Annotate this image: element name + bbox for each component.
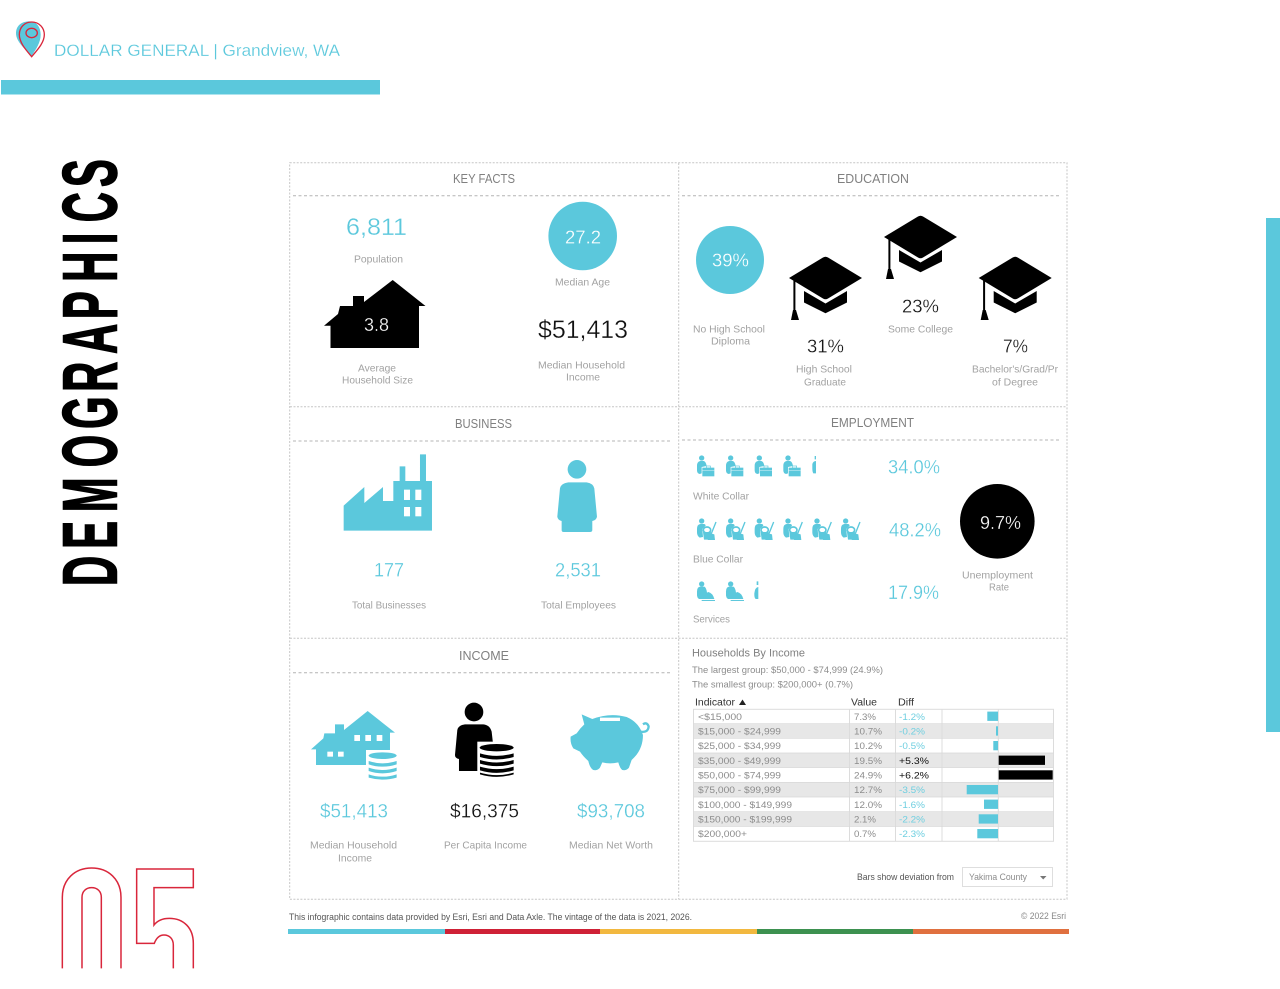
row differences bbox=[899, 712, 930, 840]
table header: Diff bbox=[898, 698, 914, 709]
row differences: +6.2% bbox=[899, 770, 930, 782]
footer: data attribution: This infographic contains data provided by Esri, Esri and Data Axle. The vintage of the data is 2021, 2026. bbox=[289, 912, 692, 923]
row values: 19.5% bbox=[854, 756, 883, 767]
stat: some college: Some College bbox=[888, 323, 953, 335]
table header bbox=[695, 698, 914, 709]
deviation bars bbox=[967, 712, 1053, 838]
stat: median household income: Median Household bbox=[538, 360, 625, 372]
row labels: $25,000 - $34,999 bbox=[698, 741, 781, 752]
stat: high school graduate bbox=[789, 257, 862, 389]
stat: per capita income: Per Capita Income bbox=[444, 840, 527, 852]
stat: total employees: 2,531 bbox=[555, 561, 601, 582]
row values bbox=[854, 712, 883, 840]
stat: bachelor's or higher degree: of Degree bbox=[992, 377, 1038, 389]
row labels: $100,000 - $149,999 bbox=[698, 800, 792, 811]
stat: per capita income: $16,375 bbox=[450, 802, 519, 823]
stat: blue collar: 48.2% bbox=[889, 521, 941, 542]
stat: white collar: 34.0% bbox=[888, 458, 940, 479]
stat: blue collar: Blue Collar bbox=[693, 554, 743, 566]
stat: total employees: Total Employees bbox=[541, 600, 616, 612]
row values: 0.7% bbox=[854, 829, 877, 840]
summary: largest group: The largest group: $50,000 - $74,999 (24.9%) bbox=[692, 665, 883, 676]
stat: some college: 23% bbox=[902, 297, 939, 317]
icon: factory bbox=[344, 454, 432, 531]
stat: median net worth: $93,708 bbox=[577, 802, 645, 823]
icon: employee person bbox=[557, 460, 597, 532]
stat: unemployment rate circle: Unemployment bbox=[962, 570, 1033, 582]
pictogram: services workers bbox=[697, 581, 758, 601]
pictogram: blue collar workers bbox=[697, 518, 860, 540]
stat: high school graduate: High School bbox=[796, 364, 852, 376]
stat: population bbox=[346, 214, 407, 266]
row labels: $75,000 - $99,999 bbox=[698, 785, 781, 796]
table header: Indicator bbox=[695, 698, 736, 709]
header: location pin icon bbox=[16, 21, 44, 57]
row differences: -0.2% bbox=[899, 726, 926, 738]
row labels: $35,000 - $49,999 bbox=[698, 756, 781, 767]
row differences: +5.3% bbox=[899, 756, 930, 767]
stat: bachelor's or higher degree: Bachelor's/Grad/Pr bbox=[972, 364, 1058, 376]
stat: household size house icon: Household Size bbox=[342, 375, 413, 387]
footer: copyright: © 2022 Esri bbox=[1021, 911, 1066, 922]
stat: no high school diploma: No High School bbox=[693, 323, 765, 335]
stat: median household income bbox=[310, 802, 397, 865]
stat: median household income: $51,413 bbox=[538, 316, 628, 344]
pictogram: white collar workers bbox=[697, 455, 816, 476]
stat: median household income: Income bbox=[566, 372, 600, 384]
row values: 12.0% bbox=[854, 800, 883, 811]
stat: services: Services bbox=[693, 614, 730, 626]
heading: households by income: Households By Income bbox=[692, 648, 805, 660]
stat: unemployment rate circle: 9.7% bbox=[980, 513, 1021, 533]
row values: 10.2% bbox=[854, 741, 883, 752]
panel: business bbox=[344, 417, 616, 612]
stat: blue collar bbox=[693, 521, 941, 566]
stat: high school graduate: Graduate bbox=[804, 377, 846, 389]
stat: bachelor's or higher degree bbox=[972, 257, 1058, 389]
row values: 12.7% bbox=[854, 785, 883, 796]
stat: median household income: Income bbox=[338, 853, 372, 865]
panel: key facts bbox=[324, 172, 628, 387]
stat: median age circle: Median Age bbox=[555, 277, 610, 289]
stat: white collar bbox=[693, 458, 940, 503]
stat: median net worth bbox=[569, 802, 653, 852]
row values: 10.7% bbox=[854, 726, 883, 738]
row differences: -2.2% bbox=[899, 814, 926, 826]
dashboard frame dashed lines bbox=[290, 163, 1067, 899]
stat: total businesses: 177 bbox=[374, 561, 404, 582]
stat: median age circle: 27.2 bbox=[565, 228, 601, 248]
header: location title: DOLLAR GENERAL | Grandview, WA bbox=[54, 41, 341, 60]
control: bars deviation selector: Yakima County bbox=[969, 872, 1027, 883]
row values: 7.3% bbox=[854, 712, 877, 723]
icon: piggy bank bbox=[571, 714, 649, 770]
stat: household size house icon bbox=[324, 280, 426, 387]
stat: total businesses: Total Businesses bbox=[352, 600, 426, 612]
row labels: <$15,000 bbox=[698, 712, 742, 723]
control: bars deviation selector bbox=[857, 868, 1052, 886]
stat: per capita income bbox=[444, 802, 527, 852]
heading: income: INCOME bbox=[459, 649, 509, 663]
heading: employment: EMPLOYMENT bbox=[831, 416, 914, 430]
stat: no high school diploma: Diploma bbox=[711, 336, 750, 348]
row labels: $50,000 - $74,999 bbox=[698, 770, 781, 782]
stat: no high school diploma bbox=[693, 226, 765, 348]
section title: DEMOGRAPHICS: DEMOGRAPHICS bbox=[48, 159, 134, 586]
row labels bbox=[698, 712, 792, 840]
panel: households by income bbox=[692, 648, 1054, 886]
stat: some college bbox=[884, 216, 957, 335]
table: income distribution bbox=[694, 698, 1054, 841]
stat: services bbox=[693, 583, 939, 626]
control: bars deviation selector: Bars show deviation from bbox=[857, 872, 954, 883]
heading: key facts: KEY FACTS bbox=[453, 172, 515, 186]
stat: total employees bbox=[541, 561, 616, 612]
row differences: -2.3% bbox=[899, 829, 926, 840]
heading: business: BUSINESS bbox=[455, 417, 512, 431]
row labels: $150,000 - $199,999 bbox=[698, 814, 792, 826]
stat: unemployment rate circle: Rate bbox=[989, 582, 1009, 594]
stat: bachelor's or higher degree: 7% bbox=[1003, 337, 1028, 357]
table row shading and grid bbox=[694, 709, 1054, 841]
stat: median age circle bbox=[548, 202, 617, 289]
heading: education: EDUCATION bbox=[837, 172, 909, 186]
stat: household size house icon: 3.8 bbox=[364, 315, 389, 335]
stat: median net worth: Median Net Worth bbox=[569, 840, 653, 852]
stat: no high school diploma: 39% bbox=[712, 251, 749, 271]
right edge accent bar bbox=[1266, 218, 1280, 732]
stat: high school graduate: 31% bbox=[807, 337, 844, 357]
stat: household size house icon: Average bbox=[358, 363, 396, 375]
stat: population: Population bbox=[354, 254, 403, 266]
panel: employment bbox=[693, 416, 1035, 626]
icon: person with coins bbox=[455, 703, 516, 780]
stat: population: 6,811 bbox=[346, 214, 407, 241]
stat: services: 17.9% bbox=[888, 583, 939, 604]
table header: Value bbox=[851, 698, 877, 709]
row differences: -0.5% bbox=[899, 741, 926, 752]
row labels: $200,000+ bbox=[698, 829, 747, 840]
stat: unemployment rate circle bbox=[960, 484, 1035, 594]
stat: median household income: Median Household bbox=[310, 840, 397, 852]
stat: median household income: $51,413 bbox=[320, 802, 388, 823]
panel: education bbox=[693, 172, 1058, 389]
footer: colour stripe bbox=[288, 929, 1069, 934]
icon: house with coins bbox=[311, 711, 399, 782]
stat: total businesses bbox=[352, 561, 426, 612]
row labels: $15,000 - $24,999 bbox=[698, 726, 781, 738]
stat: white collar: White Collar bbox=[693, 491, 749, 503]
summary: smallest group: The smallest group: $200,000+ (0.7%) bbox=[692, 680, 853, 691]
row differences: -1.6% bbox=[899, 800, 926, 811]
panel: income bbox=[310, 649, 653, 865]
row values: 2.1% bbox=[854, 814, 877, 826]
row values: 24.9% bbox=[854, 770, 883, 782]
row differences: -3.5% bbox=[899, 785, 926, 796]
section number 05 outline bbox=[62, 868, 193, 968]
row differences: -1.2% bbox=[899, 712, 926, 723]
header accent bar bbox=[1, 80, 380, 94]
stat: median household income bbox=[538, 316, 628, 384]
